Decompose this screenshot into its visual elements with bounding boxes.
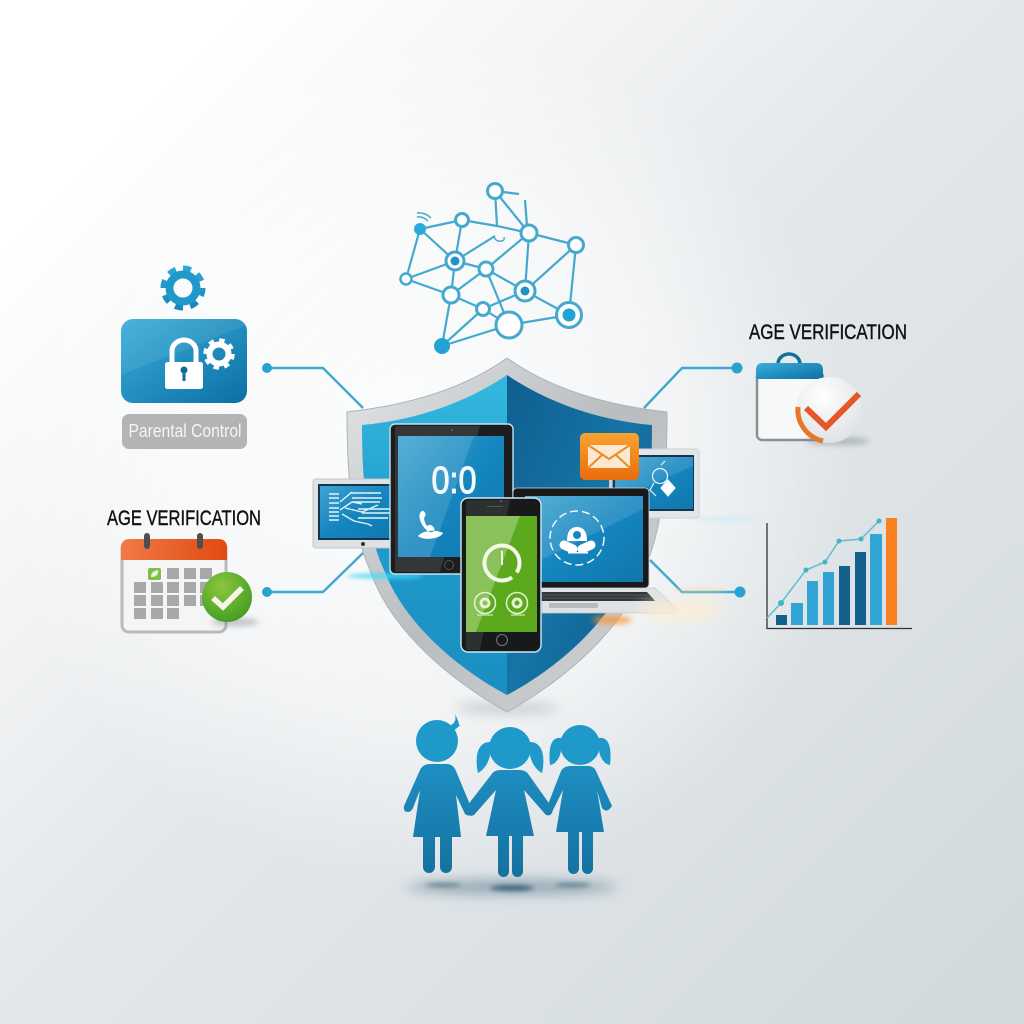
green check badge	[202, 572, 252, 622]
node	[479, 262, 493, 276]
small gear	[206, 340, 232, 368]
children shadow	[407, 880, 617, 894]
bars	[776, 615, 787, 625]
tablet body	[390, 424, 513, 574]
node	[496, 312, 522, 338]
calendar icon	[121, 533, 259, 632]
node	[414, 223, 426, 235]
laptop	[513, 488, 677, 613]
monitor screen	[613, 455, 694, 511]
padlock icon	[165, 340, 203, 389]
tablet screen	[398, 436, 504, 557]
gear icon	[164, 268, 202, 308]
node	[488, 184, 502, 198]
glow: cyan	[347, 574, 423, 578]
home button	[444, 560, 454, 570]
laptop lid	[513, 488, 649, 588]
glow: orange	[592, 518, 757, 624]
trend line	[767, 521, 879, 618]
trackpad	[549, 603, 598, 608]
shield right face	[507, 375, 652, 695]
timer icon	[478, 539, 526, 587]
keyboard	[541, 592, 655, 601]
node	[400, 274, 412, 284]
tablet	[390, 424, 513, 574]
right heading: AGE VERIFICATION	[749, 321, 907, 344]
shield shadow	[455, 703, 559, 713]
bar chart	[767, 518, 912, 628]
phone body	[461, 498, 541, 652]
phone screen	[466, 516, 537, 632]
node core	[450, 256, 460, 266]
webcam icon right	[506, 592, 528, 615]
trend points	[778, 518, 882, 606]
node	[476, 302, 490, 316]
dashed ring	[550, 511, 604, 565]
timer hand	[501, 551, 503, 565]
ball shadow	[806, 437, 870, 445]
network diagram	[400, 184, 584, 354]
orange envelope icon	[580, 433, 639, 490]
panel: parental control card	[121, 319, 247, 403]
green date mark	[148, 568, 161, 580]
node	[515, 281, 535, 301]
node	[446, 252, 464, 270]
node	[434, 338, 450, 354]
people icon	[564, 527, 591, 554]
tablet clock text: 0:0	[432, 460, 476, 502]
monitor frame	[313, 479, 395, 548]
node	[521, 225, 537, 241]
left monitor	[313, 479, 395, 548]
monitor screen	[318, 484, 394, 540]
right monitor	[613, 449, 699, 518]
children holding hands	[404, 714, 612, 877]
monitor frame	[613, 449, 699, 518]
boy	[404, 714, 473, 873]
axes	[767, 523, 912, 628]
laptop screen	[525, 496, 643, 582]
calendar rings	[144, 533, 150, 549]
clipboard header	[756, 363, 823, 379]
girl centre	[467, 727, 553, 877]
node core	[562, 308, 576, 322]
ball	[796, 377, 862, 443]
monitor icon	[650, 461, 675, 496]
schematic lines	[329, 492, 390, 526]
node core	[520, 286, 530, 296]
left heading: AGE VERIFICATION	[107, 507, 261, 530]
clipboard check icon	[756, 354, 870, 445]
check badge shadow	[211, 618, 259, 626]
calendar body	[122, 541, 226, 632]
laptop base	[542, 588, 677, 613]
node	[568, 238, 584, 252]
node	[556, 302, 582, 328]
webcam dot	[361, 542, 365, 546]
phone handset icon	[418, 511, 443, 539]
phone home button	[496, 634, 508, 646]
shield	[347, 358, 667, 712]
wifi mark	[417, 213, 431, 221]
calendar header	[121, 539, 227, 560]
clipboard handle	[778, 354, 800, 368]
check mark	[806, 394, 859, 427]
node	[456, 214, 468, 226]
parental control label: Parental Control	[128, 421, 242, 441]
girl right	[547, 725, 612, 874]
shield rim	[347, 358, 667, 712]
smartphone	[461, 498, 541, 652]
webcam icon left	[474, 592, 496, 615]
small smile mark	[494, 236, 504, 241]
connector lines	[262, 362, 746, 598]
node	[443, 287, 459, 303]
shield left face	[362, 375, 507, 695]
clipboard body	[757, 372, 823, 440]
parental control label	[122, 414, 247, 449]
orange arc	[798, 407, 823, 441]
calendar grid	[134, 568, 212, 619]
